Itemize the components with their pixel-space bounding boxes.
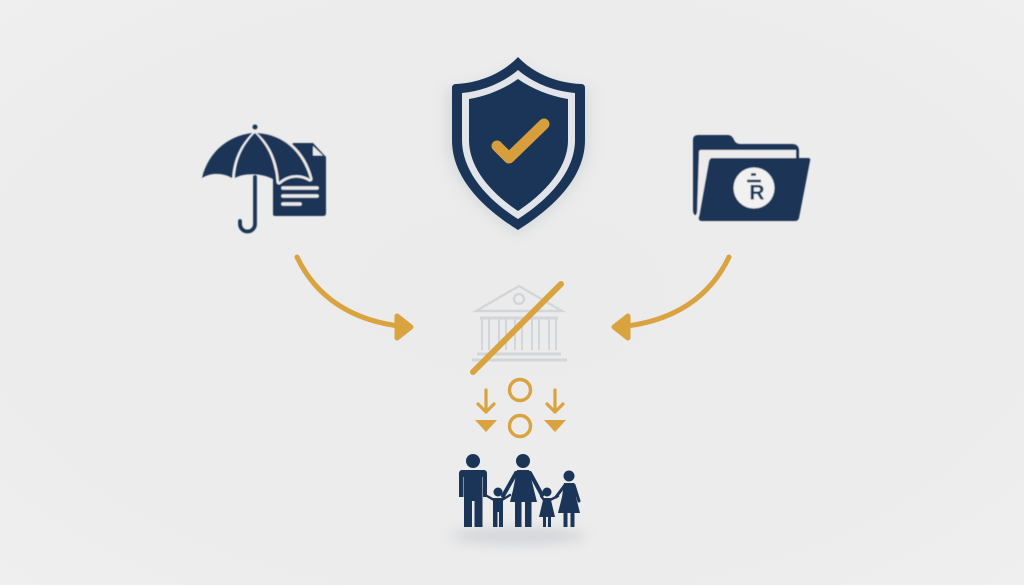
umbrella tip: [252, 124, 258, 130]
icon: down arrows and circles: [475, 380, 566, 436]
coin overbar: [747, 174, 761, 181]
shield outer: [452, 57, 585, 230]
icon: shield with check mark: [446, 57, 590, 236]
arrow: left curve to centre: [297, 257, 411, 338]
icon: faded bank building: [472, 286, 567, 360]
umbrella handle: [240, 177, 255, 232]
bank columns: [482, 319, 556, 350]
left down arrow: [478, 390, 494, 412]
right triangle: [544, 420, 566, 432]
document folded corner: [313, 146, 323, 156]
arrow: right curve to centre: [614, 257, 729, 338]
bank entablature: [480, 316, 558, 320]
coin letter: R: [749, 182, 765, 204]
shield shadow: [446, 62, 590, 236]
icon: umbrella over document: [202, 124, 326, 232]
shield ring: [462, 70, 575, 219]
child left: [487, 488, 510, 527]
family shadow: [450, 528, 586, 544]
right down arrow: [547, 390, 563, 412]
bottom circle: [510, 416, 530, 436]
icon: folder with R coin: [693, 135, 810, 221]
coin: [734, 168, 774, 208]
bank base: [472, 354, 567, 360]
slash across bank: [473, 284, 561, 372]
bank roof: [476, 286, 562, 311]
icon: family group: [459, 454, 580, 527]
left triangle: [475, 420, 497, 432]
document text lines: [283, 188, 317, 204]
shield inner: [469, 79, 568, 211]
mother: [503, 454, 542, 527]
folder sheet: [697, 150, 796, 216]
umbrella canopy right panel: [257, 133, 310, 182]
folder back: [693, 135, 799, 215]
umbrella canopy middle panel: [235, 133, 276, 181]
daughter: [556, 470, 580, 527]
folder front: [699, 158, 810, 221]
umbrella canopy left panel: [202, 133, 252, 178]
check mark: [497, 124, 544, 158]
top circle: [510, 380, 530, 400]
child right: [539, 488, 558, 527]
bank emblem: [514, 294, 524, 304]
document: [273, 143, 326, 216]
father: [459, 454, 487, 527]
